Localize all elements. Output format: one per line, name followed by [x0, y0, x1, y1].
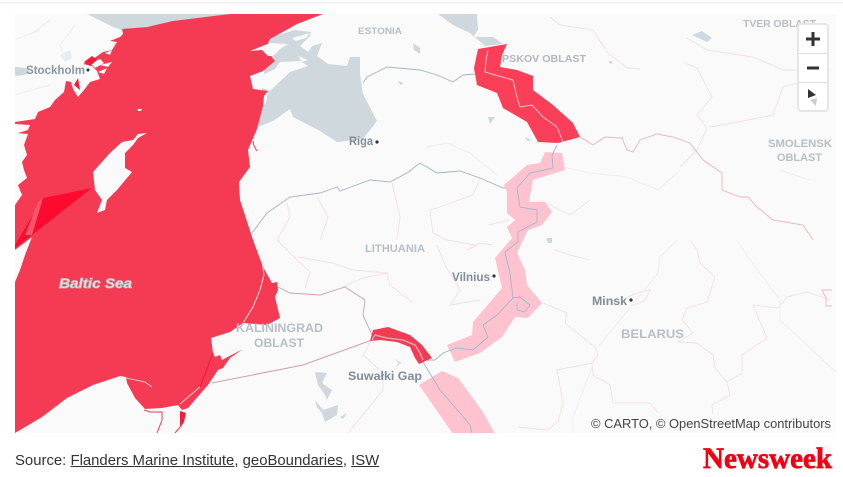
place labels: Riga — [349, 136, 374, 148]
Belarus-Lithuania section — [447, 152, 565, 362]
arrow mark near Suwalki — [395, 359, 402, 367]
place labels: BELARUS — [621, 327, 684, 341]
place labels: TVER OBLAST — [743, 19, 817, 30]
Gotland Deep wedge — [15, 188, 92, 248]
river lines — [423, 145, 557, 360]
border: Russia-Belarus — [580, 134, 813, 240]
place labels: Minsk — [592, 294, 627, 308]
place labels: PSKOV OBLAST — [502, 54, 587, 65]
attribution: © CARTO, © OpenStreetMap contributors — [591, 416, 831, 431]
border: Latvia-Lithuania — [252, 163, 517, 233]
source line: Source: Flanders Marine Institute, geoBoundaries, ISW — [15, 453, 379, 469]
place labels: LITHUANIA — [365, 243, 425, 255]
Pskov section — [474, 44, 580, 143]
place labels: ESTONIA — [358, 26, 402, 37]
Baltic Sea zone — [15, 14, 323, 433]
border: Kaliningrad — [278, 287, 372, 335]
islands and coast pieces — [15, 33, 310, 282]
Gotland — [93, 133, 147, 213]
place labels: KALININGRAD — [236, 322, 323, 335]
water: gulfs and lakes — [15, 14, 712, 422]
place labels: SMOLENSK — [768, 138, 832, 150]
red dense archipelago flecks — [74, 56, 97, 90]
Suwalki-Poland section — [419, 371, 495, 434]
place labels: Baltic Sea — [59, 275, 132, 291]
place labels — [26, 19, 832, 383]
coastal inlets — [144, 141, 257, 433]
Suwalki Gap section — [370, 327, 432, 364]
place labels: Vilnius — [452, 270, 490, 284]
place labels: Stockholm — [26, 65, 85, 77]
border: Latvia-Estonia — [363, 67, 475, 83]
place labels: OBLAST — [254, 337, 304, 350]
place labels: Suwałki Gap — [348, 369, 422, 383]
map controls — [797, 23, 829, 112]
internal borders — [277, 17, 830, 433]
place labels: OBLAST — [777, 152, 822, 164]
Newsweek logo: Newsweek — [703, 443, 833, 475]
